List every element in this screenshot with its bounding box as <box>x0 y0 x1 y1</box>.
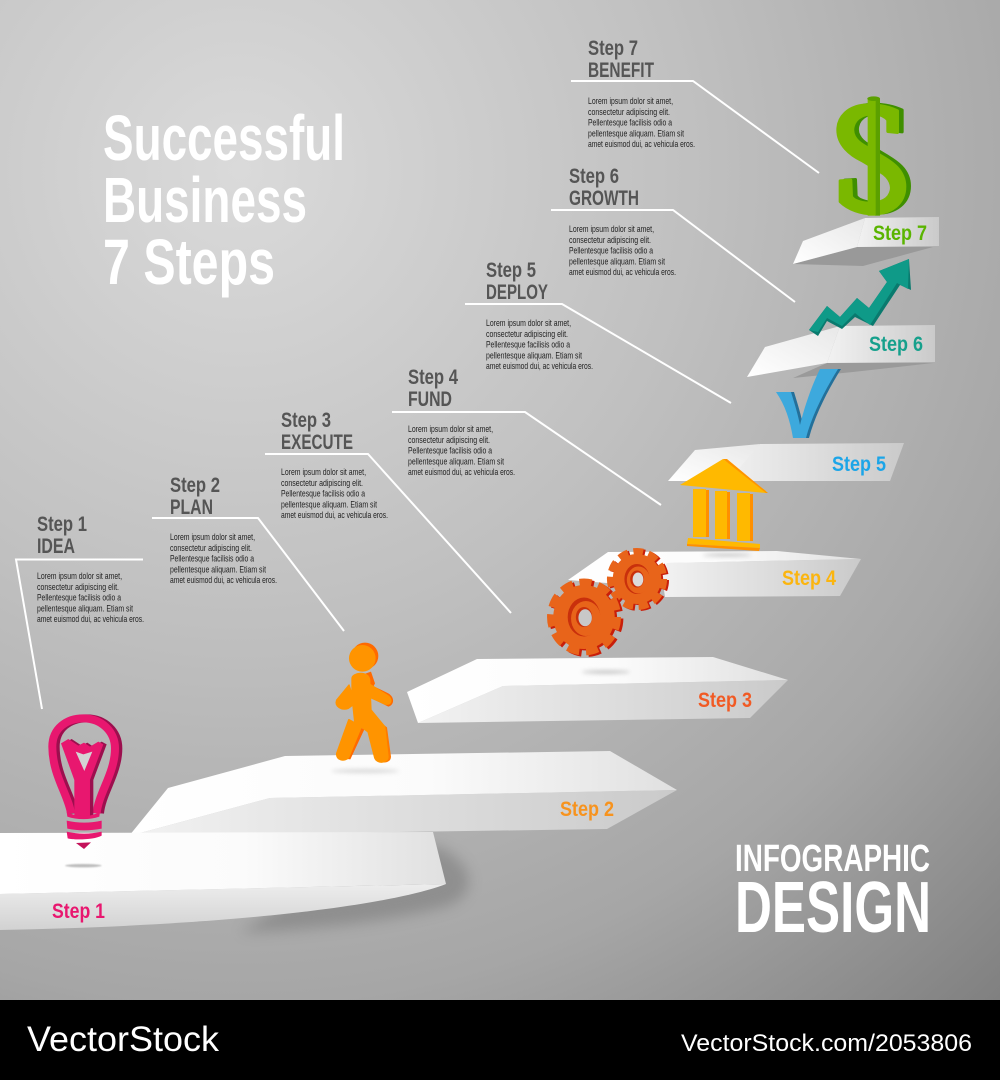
step 1 body text <box>37 571 144 625</box>
step 5 body text <box>486 318 593 372</box>
footer bar <box>0 1000 1000 1080</box>
infographic design caption: INFOGRAPHIC <box>735 838 930 880</box>
step 1 heading: Step 1 <box>37 513 87 536</box>
step 3 heading: Step 3 <box>281 409 331 432</box>
step 5 body text: amet euismod dui, ac vehicula eros. <box>486 361 593 372</box>
icon: growth arrow <box>809 259 911 336</box>
panel: step 7 text <box>571 37 819 173</box>
icon: check mark <box>776 369 841 438</box>
footer image id: VectorStock.com/2053806 <box>681 1030 972 1057</box>
step 3 heading <box>281 409 353 454</box>
step 4 heading: Step 4 <box>408 366 458 389</box>
panel: step 4 text <box>392 366 661 505</box>
step 3 body text: pellentesque aliquam. Etiam sit <box>281 500 377 510</box>
step labels on platforms: Step 1 <box>52 900 105 923</box>
step 2 body text: consectetur adipiscing elit. <box>170 543 252 554</box>
platform: step 7 <box>793 217 939 266</box>
step 4 body text: amet euismod dui, ac vehicula eros. <box>408 467 515 478</box>
step labels on platforms: Step 7 <box>873 222 927 245</box>
step 4 body text: pellentesque aliquam. Etiam sit <box>408 456 504 468</box>
step 5 heading: Step 5 <box>486 259 536 282</box>
platform: step 6 <box>747 325 935 378</box>
title <box>103 102 345 298</box>
step 4 body text: Lorem ipsum dolor sit amet, <box>408 424 493 435</box>
step 2 heading: PLAN <box>170 496 213 519</box>
step 1 body text: Pellentesque facilisis odio a <box>37 592 122 604</box>
step 7 body text <box>588 96 695 150</box>
step 2 body text: pellentesque aliquam. Etiam sit <box>170 564 266 576</box>
step 3 leader line <box>265 454 511 613</box>
step 1 heading <box>37 513 87 558</box>
step labels on platforms: Step 4 <box>782 567 836 590</box>
step 6 body text: consectetur adipiscing elit. <box>569 235 651 246</box>
panel: step 1 text <box>16 513 144 709</box>
step 7 body text: consectetur adipiscing elit. <box>588 107 670 118</box>
panel: step 6 text <box>551 165 795 302</box>
step 6 body text: amet euismod dui, ac vehicula eros. <box>569 267 676 278</box>
step 5 heading: DEPLOY <box>486 281 548 304</box>
step 6 heading <box>569 165 639 210</box>
icon: light bulb <box>52 718 118 867</box>
step 7 body text: Pellentesque facilisis odio a <box>588 118 673 128</box>
step 5 leader line <box>465 304 731 403</box>
step labels on platforms <box>52 222 927 923</box>
step 7 heading: BENEFIT <box>588 59 654 82</box>
step 4 leader line <box>392 412 661 505</box>
step 4 body text: Pellentesque facilisis odio a <box>408 446 493 456</box>
step 2 body text: Lorem ipsum dolor sit amet, <box>170 532 255 543</box>
step 1 heading: IDEA <box>37 535 75 558</box>
icon: small gear <box>610 552 666 608</box>
step 2 leader line <box>152 518 344 631</box>
platform: step 1 <box>0 832 446 930</box>
step 7 heading: Step 7 <box>588 37 638 60</box>
step 2 body text: Pellentesque facilisis odio a <box>170 554 255 564</box>
step 4 heading: FUND <box>408 388 452 411</box>
step 5 heading <box>486 259 548 304</box>
step 5 body text: Lorem ipsum dolor sit amet, <box>486 318 571 329</box>
step labels on platforms: Step 3 <box>698 689 752 712</box>
step 5 body text: pellentesque aliquam. Etiam sit <box>486 350 582 362</box>
platform: step 2 <box>129 751 677 836</box>
step 7 heading <box>588 37 654 82</box>
step 1 body text: pellentesque aliquam. Etiam sit <box>37 604 133 614</box>
panel: step 3 text <box>265 409 511 613</box>
step 1 body text: amet euismod dui, ac vehicula eros. <box>37 614 144 625</box>
title: Successful <box>103 102 345 174</box>
step 3 body text: Lorem ipsum dolor sit amet, <box>281 467 366 478</box>
step 3 body text <box>281 467 388 521</box>
step 4 body text <box>408 424 515 478</box>
step 4 body text: consectetur adipiscing elit. <box>408 435 490 446</box>
icon: walking person <box>336 643 393 762</box>
step 7 body text: pellentesque aliquam. Etiam sit <box>588 128 684 140</box>
step labels on platforms: Step 6 <box>869 333 923 356</box>
step labels on platforms: Step 2 <box>560 798 614 821</box>
step 2 body text <box>170 532 277 586</box>
step 6 leader line <box>551 210 795 302</box>
platform shadow: step 1 <box>240 845 469 932</box>
icon: bank building <box>680 459 768 551</box>
step 6 body text: pellentesque aliquam. Etiam sit <box>569 256 665 268</box>
icon: large gear <box>551 582 620 653</box>
title: 7 Steps <box>103 226 275 298</box>
step 4 heading <box>408 366 458 411</box>
step 3 body text: Pellentesque facilisis odio a <box>281 488 366 500</box>
step 6 heading: GROWTH <box>569 187 639 210</box>
step 2 heading: Step 2 <box>170 474 220 497</box>
step 3 body text: consectetur adipiscing elit. <box>281 478 363 489</box>
step 7 body text: Lorem ipsum dolor sit amet, <box>588 96 673 107</box>
panel: step 2 text <box>152 474 344 631</box>
step 2 heading <box>170 474 220 519</box>
footer brand: VectorStock <box>27 1020 220 1059</box>
panel: step 5 text <box>465 259 731 403</box>
platform: step 4 <box>568 551 861 597</box>
step 7 body text: amet euismod dui, ac vehicula eros. <box>588 139 695 150</box>
icon: dollar sign <box>838 96 910 216</box>
step 1 body text: consectetur adipiscing elit. <box>37 582 119 593</box>
step 1 leader line <box>16 560 143 709</box>
step 5 body text: Pellentesque facilisis odio a <box>486 340 571 350</box>
title: Business <box>103 164 307 236</box>
step 2 body text: amet euismod dui, ac vehicula eros. <box>170 575 277 586</box>
step 6 heading: Step 6 <box>569 165 619 188</box>
step 3 body text: amet euismod dui, ac vehicula eros. <box>281 510 388 521</box>
infographic design caption <box>735 838 931 948</box>
step 6 body text: Pellentesque facilisis odio a <box>569 246 654 256</box>
step 7 leader line <box>571 81 819 173</box>
step 3 heading: EXECUTE <box>281 431 353 454</box>
platform: step 5 <box>668 443 904 481</box>
step 5 body text: consectetur adipiscing elit. <box>486 329 568 340</box>
step 6 body text: Lorem ipsum dolor sit amet, <box>569 224 654 235</box>
platform: step 3 <box>407 657 788 723</box>
step 6 body text <box>569 224 676 278</box>
step 1 body text: Lorem ipsum dolor sit amet, <box>37 571 122 582</box>
step labels on platforms: Step 5 <box>832 453 886 476</box>
